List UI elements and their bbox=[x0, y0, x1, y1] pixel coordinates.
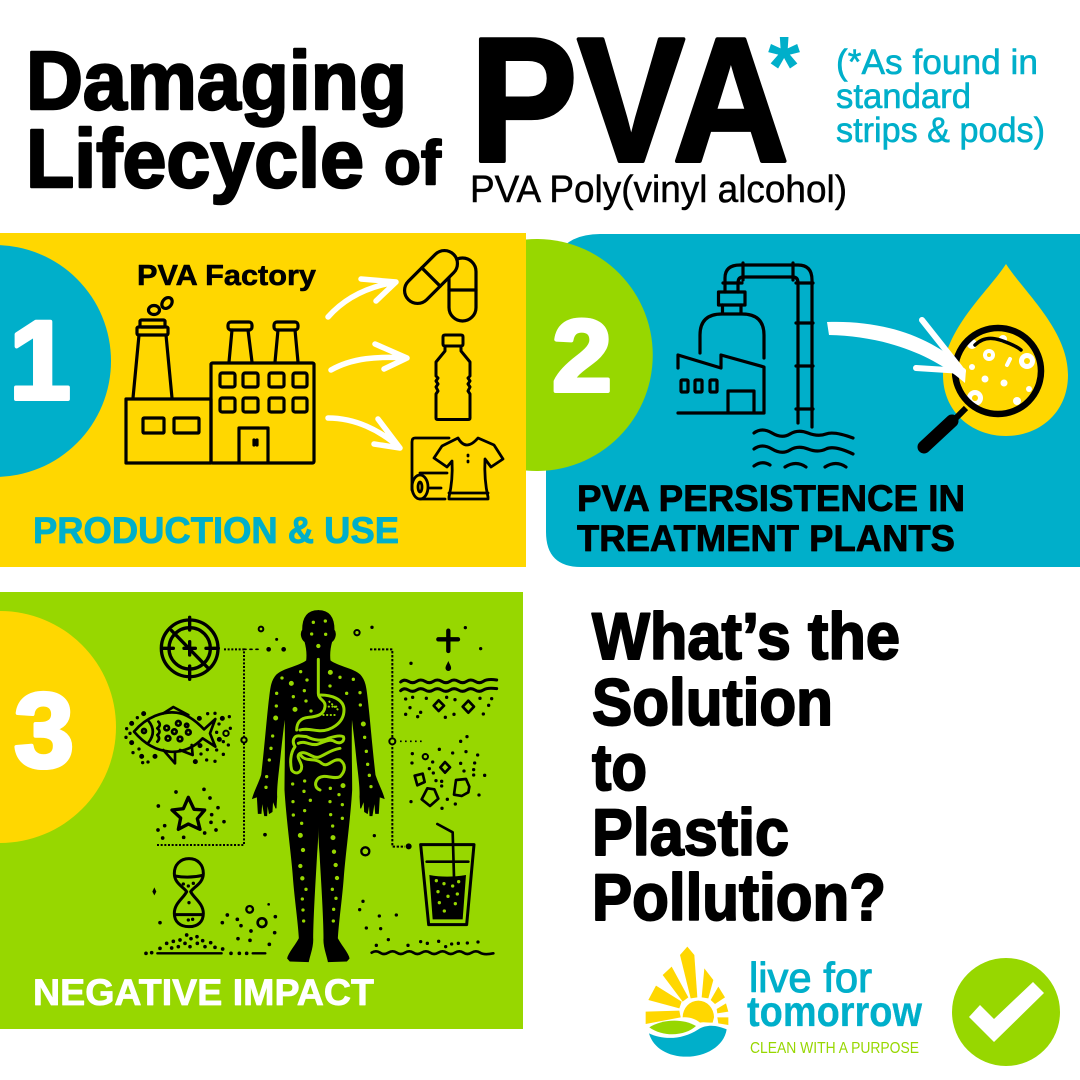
icon: treatment plant with pipe bbox=[678, 263, 853, 467]
icon: star bbox=[172, 797, 205, 829]
icon: factory bbox=[126, 296, 314, 463]
number badge 3: 3 bbox=[14, 672, 74, 790]
arrow to drop bbox=[827, 320, 966, 383]
particles around star bbox=[158, 789, 265, 838]
logo mark: sun over water bbox=[646, 947, 728, 1057]
logo tagline: CLEAN WITH A PURPOSE bbox=[750, 1040, 919, 1057]
label: persistence in treatment plants: TREATMENT PLANTS bbox=[577, 518, 955, 559]
sand pile and particles bbox=[146, 915, 275, 953]
panel: production and use bbox=[0, 233, 526, 567]
icon: microplastic fragments bbox=[411, 737, 485, 808]
icon: pills bbox=[399, 245, 476, 321]
title: Damaging Lifecycle of PVA: PVA bbox=[470, 1, 789, 199]
heading: PVA Factory: PVA Factory bbox=[137, 260, 316, 292]
panel: negative impact bbox=[0, 592, 523, 1029]
icon: drop under magnifier bbox=[924, 264, 1068, 447]
number badge 3 bbox=[0, 611, 116, 843]
icon: target with cross-out bbox=[161, 617, 218, 679]
title: Damaging Lifecycle of PVA: * bbox=[768, 19, 800, 113]
label: negative impact: NEGATIVE IMPACT bbox=[33, 972, 374, 1013]
question: what's the solution to plastic pollution: What’s the bbox=[592, 599, 900, 673]
icon: glass with contaminated drink bbox=[421, 824, 474, 925]
footnote: as found in strips and pods bbox=[836, 43, 1045, 150]
title: Damaging Lifecycle of PVA: Lifecycle bbox=[26, 112, 364, 205]
title: Damaging Lifecycle of PVA: Damaging bbox=[26, 34, 407, 127]
dotted connector right bbox=[370, 649, 424, 849]
logo wordmark: tomorrow bbox=[747, 988, 922, 1036]
question: what's the solution to plastic pollution bbox=[592, 599, 900, 934]
number badge 1 bbox=[0, 245, 111, 477]
label: persistence in treatment plants: PVA PERSISTENCE IN bbox=[577, 478, 965, 519]
sediment and particles bbox=[360, 901, 493, 954]
label: persistence in treatment plants bbox=[577, 478, 965, 559]
icons left of body bbox=[126, 617, 284, 953]
number badge 2 bbox=[526, 239, 653, 471]
arrow to bottle bbox=[331, 344, 407, 370]
scattered rings bbox=[265, 627, 374, 855]
icon: chemical drop on water bbox=[401, 628, 497, 717]
question: what's the solution to plastic pollution: Plastic bbox=[592, 795, 789, 869]
icon: check mark badge bbox=[952, 958, 1060, 1066]
icon: fish bbox=[134, 707, 215, 763]
logo wordmark bbox=[747, 954, 922, 1036]
microplastic dots on body bbox=[266, 621, 371, 921]
number badge 2: 2 bbox=[552, 299, 612, 413]
question: what's the solution to plastic pollution: Pollution? bbox=[592, 860, 886, 934]
icon: plastic bottle bbox=[436, 335, 470, 420]
label: production and use: PRODUCTION & USE bbox=[33, 510, 399, 551]
arrow to pills bbox=[328, 279, 396, 317]
question: what's the solution to plastic pollution: Solution bbox=[592, 665, 833, 739]
number badge 1: 1 bbox=[9, 298, 71, 423]
icon: shirt and fabric roll bbox=[412, 438, 503, 499]
title: Damaging Lifecycle of PVA: of bbox=[384, 129, 441, 198]
question: what's the solution to plastic pollution: to bbox=[592, 730, 647, 804]
footnote: as found in strips and pods: standard bbox=[836, 77, 971, 116]
logo: live for tomorrow bbox=[646, 947, 922, 1057]
dotted connector left bbox=[157, 627, 284, 845]
footnote: as found in strips and pods: (*As found in bbox=[836, 43, 1038, 82]
icon: hourglass bbox=[174, 859, 203, 927]
footnote: as found in strips and pods: strips & pods) bbox=[836, 111, 1045, 150]
logo wordmark: live for bbox=[749, 954, 872, 1001]
icon: human body with microplastics bbox=[253, 611, 384, 962]
arrow to textiles bbox=[328, 418, 400, 448]
particles around fish bbox=[132, 714, 222, 762]
subtitle: chemical name: PVA Poly(vinyl alcohol) bbox=[470, 169, 847, 211]
icons right of body bbox=[265, 627, 497, 954]
title: Damaging Lifecycle of PVA bbox=[26, 1, 800, 205]
organs: stomach and intestines bbox=[291, 659, 344, 790]
panel: persistence in treatment plants bbox=[526, 234, 1080, 567]
